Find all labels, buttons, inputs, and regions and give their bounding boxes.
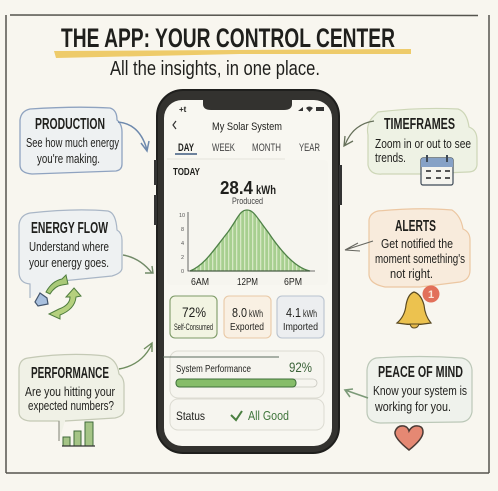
- icon: bar chart: [62, 422, 95, 446]
- panel: production: See how much energy: [26, 135, 119, 150]
- screen: [164, 100, 332, 446]
- phone: TODAY: [173, 166, 200, 178]
- panel: production: [20, 107, 122, 174]
- area chart: 6AM: [191, 277, 209, 288]
- card: status: Status: [176, 409, 205, 423]
- icon: heart: [395, 426, 423, 450]
- panel: timeframes: TIMEFRAMES: [384, 116, 455, 133]
- stat: imported: [277, 296, 324, 338]
- app title: My Solar System: [212, 121, 282, 133]
- icon: bell: 1: [428, 289, 434, 301]
- panel: alerts: ALERTS: [395, 218, 436, 235]
- card: system performance: 92%: [289, 359, 312, 375]
- area chart: 12PM: [237, 277, 258, 288]
- panel: timeframes: Zoom in or out to see: [375, 136, 471, 151]
- panel: energy flow: your energy goes.: [29, 255, 109, 270]
- arrow: peace of mind: [345, 389, 368, 398]
- panel: performance: expected numbers?: [28, 398, 114, 413]
- title: [54, 23, 411, 58]
- icon: bell: [397, 286, 440, 328]
- card: system performance: [163, 351, 324, 398]
- area chart: 2: [181, 255, 184, 261]
- icon: energy cycle: [35, 275, 81, 319]
- tabs: WEEK: [212, 142, 235, 154]
- panel: performance: Are you hitting your: [25, 384, 116, 399]
- area chart: 0: [181, 269, 184, 275]
- panel: timeframes: [368, 108, 477, 174]
- total production: [220, 178, 276, 206]
- area chart: 4: [181, 241, 184, 247]
- card: system performance: System Performance: [176, 364, 251, 375]
- arrow: timeframes: [344, 121, 374, 146]
- tabs: [167, 142, 320, 159]
- phone body: [157, 90, 339, 453]
- arrow: performance: [119, 343, 152, 369]
- panel: energy flow: [19, 210, 122, 298]
- icon: calendar: [421, 155, 453, 185]
- stat: imported: 4.1: [286, 305, 301, 320]
- arrow: energy flow: [123, 255, 153, 273]
- tabs: MONTH: [252, 142, 281, 154]
- stat: imported: kWh: [303, 309, 317, 320]
- area chart: [179, 210, 315, 288]
- panel: peace of mind: PEACE OF MIND: [378, 364, 463, 381]
- stat: self-consumed: Self-Consumed: [174, 322, 213, 332]
- card: status: All Good: [248, 408, 289, 423]
- panel: production: PRODUCTION: [35, 116, 105, 133]
- stat: self-consumed: [170, 296, 217, 338]
- panel: production: you're making.: [37, 151, 100, 166]
- panel: energy flow: ENERGY FLOW: [31, 220, 109, 237]
- area chart: 10: [179, 213, 185, 219]
- panel: performance: [19, 354, 124, 441]
- total production: 28.4: [220, 178, 253, 198]
- stat: self-consumed: 72%: [182, 304, 206, 320]
- stat: exported: kWh: [249, 309, 263, 320]
- status bar: +t: [179, 105, 187, 114]
- card: status: [170, 399, 324, 430]
- panel: peace of mind: Know your system is: [373, 383, 467, 398]
- panel: alerts: Get notified the: [381, 236, 453, 251]
- back chevron: [173, 121, 176, 129]
- tabs: YEAR: [299, 142, 320, 154]
- card: today: [167, 160, 328, 285]
- panel: alerts: [369, 209, 470, 287]
- panel: timeframes: trends.: [375, 150, 406, 165]
- panel: peace of mind: working for you.: [374, 399, 451, 414]
- status bar: [179, 105, 324, 114]
- total production: Produced: [232, 196, 263, 206]
- area chart: 8: [181, 227, 184, 233]
- arrow: production: [118, 122, 149, 151]
- panel: peace of mind: [367, 356, 472, 423]
- panel: alerts: not right.: [390, 266, 433, 281]
- panel: performance: PERFORMANCE: [31, 365, 109, 382]
- total production: kWh: [256, 183, 276, 197]
- arrow: alerts: [345, 241, 373, 251]
- stat: exported: 8.0: [232, 305, 247, 320]
- phone: [154, 90, 342, 453]
- subtitle: All the insights, in one place.: [110, 58, 320, 80]
- notch: [203, 99, 292, 110]
- stat: imported: Imported: [283, 322, 318, 333]
- stat: exported: [224, 296, 271, 338]
- stat: exported: Exported: [230, 322, 264, 333]
- tabs: DAY: [178, 142, 194, 154]
- panel: alerts: moment something's: [375, 251, 465, 266]
- area chart: 6PM: [284, 277, 302, 288]
- panel: energy flow: Understand where: [29, 239, 109, 254]
